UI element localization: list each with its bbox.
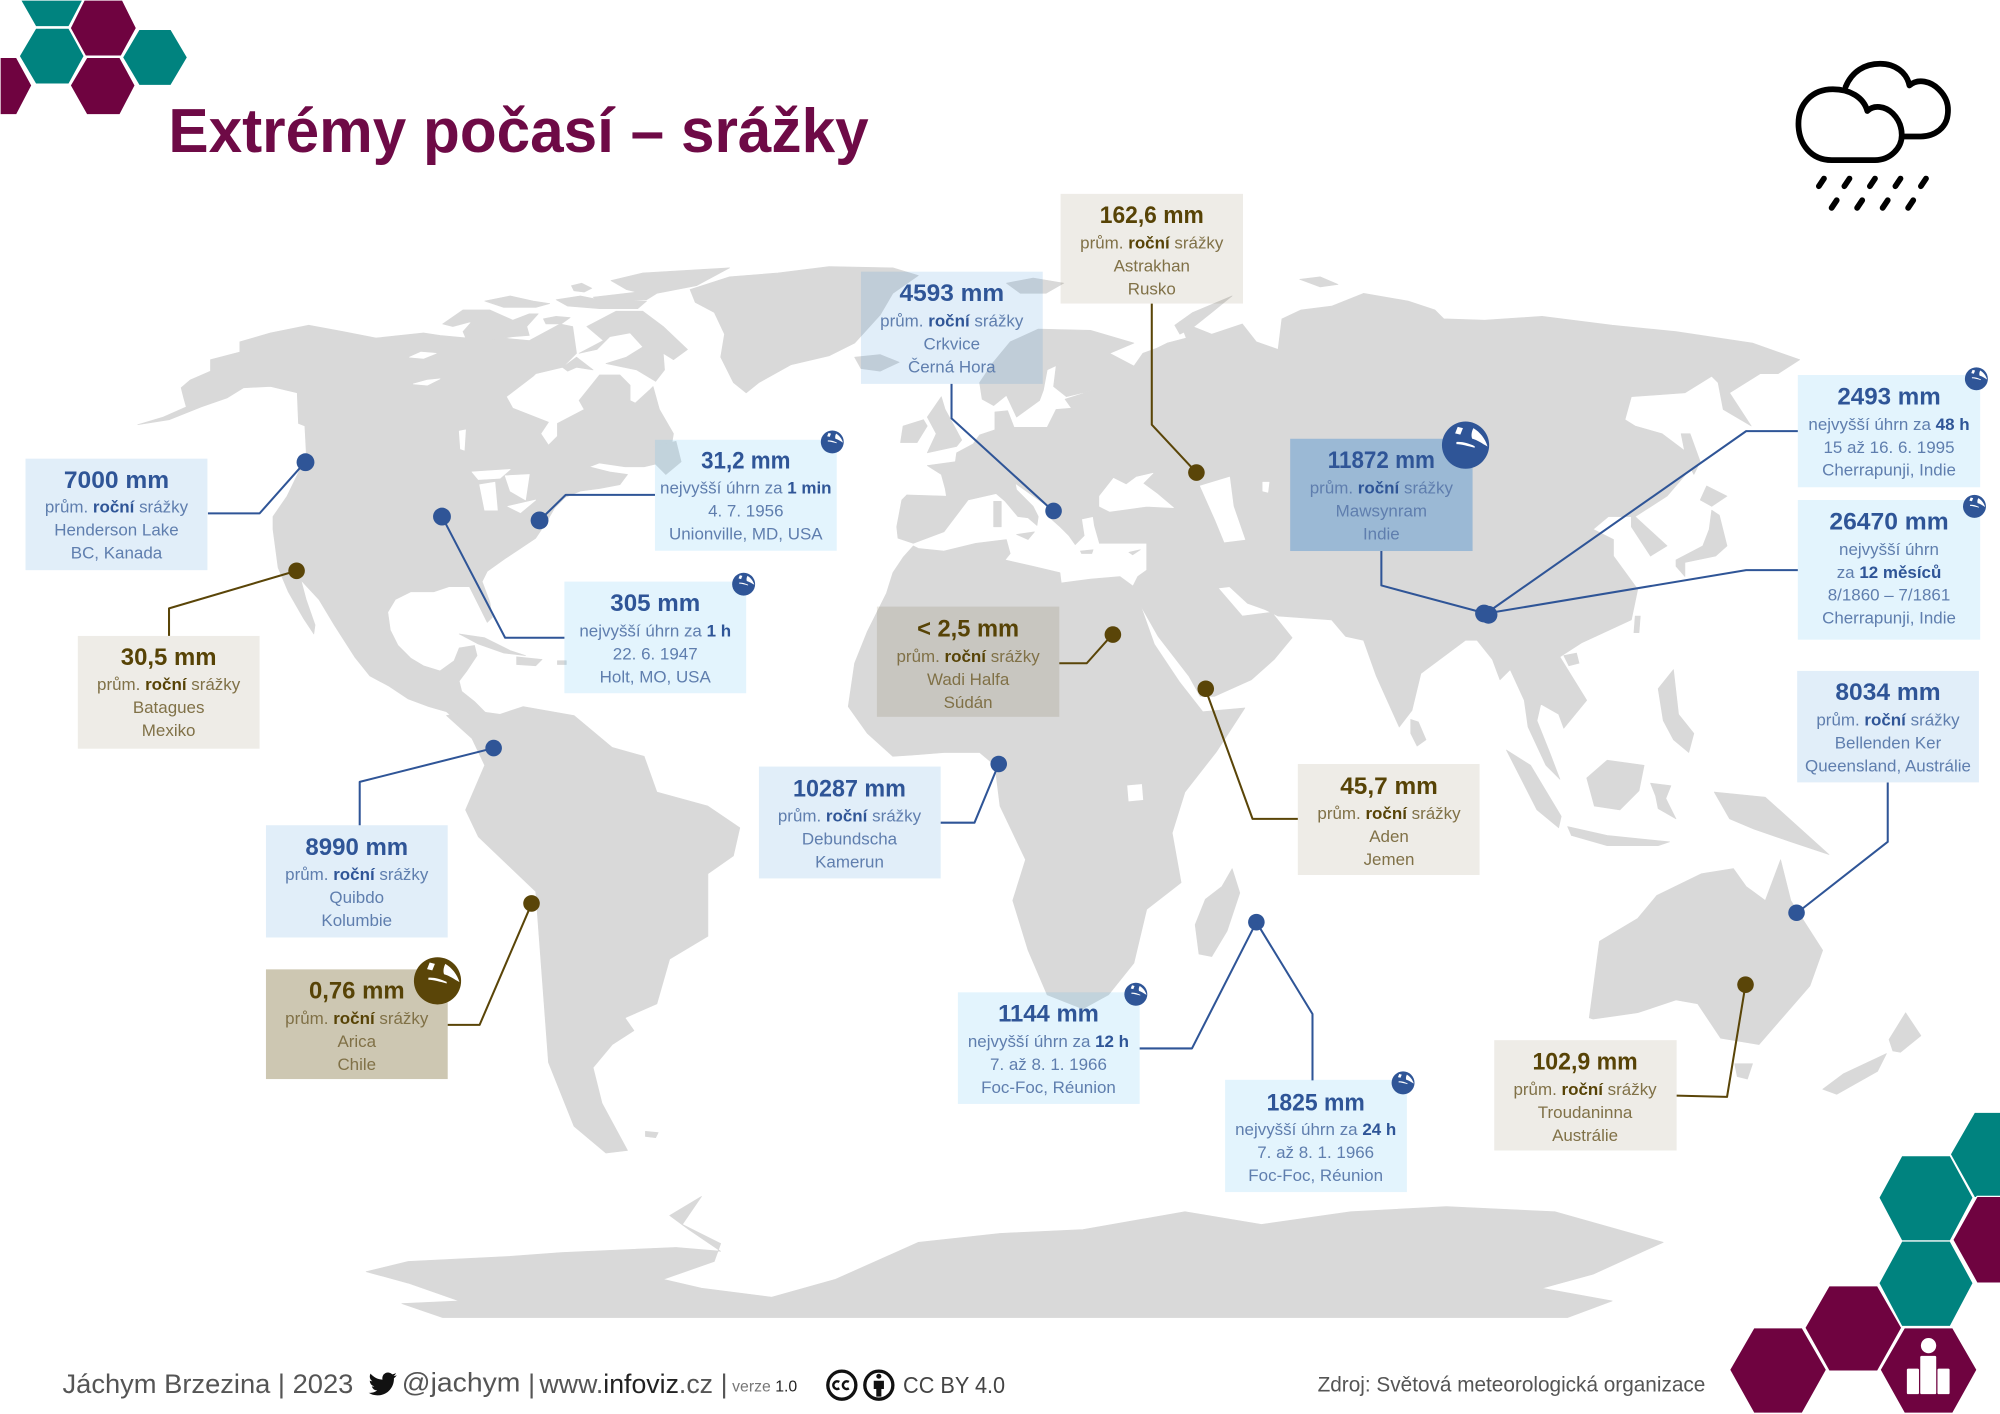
callout: 10287 mm Debundscha: Debundscha [802,829,898,848]
callout: 2493 mm Cherrapunji: 2493 mm [1837,383,1941,410]
footer: website and version: | [721,1369,728,1399]
callout: 8034 mm Bellenden Ker: prům. roční srážky [1816,711,1960,730]
callout: 26470 mm Cherrapunji: 8/1860 – 7/1861 [1828,586,1950,605]
callout: < 2,5 mm Wadi Halfa: Súdán [944,693,993,712]
callout: 0,76 mm Arica: Chile [337,1055,376,1074]
map: Eurasia [897,293,1800,779]
map: Greenland [690,267,918,393]
callout: 2493 mm Cherrapunji: 15 až 16. 6. 1995 [1823,438,1955,457]
callout: 10287 mm Debundscha: Kamerun [815,852,884,871]
callout: 11872 mm Mawsynram: Mawsynram [1336,502,1427,521]
callout: 1144 mm Foc-Foc: 7. až 8. 1. 1966 [990,1055,1107,1074]
callout: 162,6 mm Astrakhan: prům. roční srážky [1080,234,1224,253]
decorative hexagons: bottom right [1730,1112,2000,1413]
callout: 10287 mm Debundscha: prům. roční srážky [778,806,922,825]
callout: 8990 mm Quibdo: Kolumbie [321,911,392,930]
callout: 162,6 mm Astrakhan [1061,194,1243,481]
callout: 1144 mm Foc-Foc: Foc-Foc, Réunion [981,1078,1116,1097]
callout: 30,5 mm Batagues: Batagues [133,698,204,717]
callout: 102,9 mm Troudaninna: 102,9 mm [1532,1048,1638,1075]
callout: 11872 mm Mawsynram: 11872 mm [1328,447,1435,474]
callout: 305 mm Holt: 22. 6. 1947 [613,644,698,663]
icon: rain cloud [1798,64,1948,208]
callout: 0,76 mm Arica: prům. roční srážky [285,1009,429,1028]
callout: 10287 mm Debundscha: 10287 mm [793,776,906,803]
callout: 305 mm Holt: nejvyšší úhrn za 1 h [579,621,731,640]
callout: 26470 mm Cherrapunji: 26470 mm [1829,508,1949,535]
callout: 1825 mm Foc-Foc: 1825 mm [1267,1089,1365,1116]
callout: 30,5 mm Batagues: prům. roční srážky [97,675,241,694]
callout: 162,6 mm Astrakhan: Astrakhan [1114,257,1190,276]
callout: 2493 mm Cherrapunji: Cherrapunji, Indie [1822,461,1956,480]
callout: 1825 mm Foc-Foc [1225,922,1415,1192]
callout: 31,2 mm Unionville: 4. 7. 1956 [708,502,784,521]
decorative hexagons: top left [0,0,188,115]
callout: 305 mm Holt: Holt, MO, USA [600,667,712,686]
map: Africa [848,540,1245,1009]
callout: 31,2 mm Unionville: 31,2 mm [701,448,790,475]
callout: 102,9 mm Troudaninna [1494,976,1754,1150]
callout: 162,6 mm Astrakhan: Rusko [1128,280,1176,299]
callout: 4593 mm Crkvice: Černá Hora [908,357,996,376]
callout: 1144 mm Foc-Foc: 1144 mm [998,1001,1099,1028]
world map [138,267,1921,1318]
callout: 4593 mm Crkvice: 4593 mm [899,280,1004,307]
callout: 26470 mm Cherrapunji: za 12 měsíců [1837,563,1941,582]
map: Antarctica [366,1196,1663,1318]
map: Madagascar [1195,869,1240,957]
callout: 45,7 mm Aden: Aden [1369,827,1409,846]
footer: source: Zdroj: Světová meteorologická organizace [1318,1374,1705,1397]
callout: 30,5 mm Batagues [78,562,305,749]
footer: author and year: Jáchym Brzezina | 2023 [63,1369,353,1399]
callout: 1825 mm Foc-Foc: Foc-Foc, Réunion [1248,1166,1383,1185]
callout: 4593 mm Crkvice: Crkvice [924,334,980,353]
callout: 26470 mm Cherrapunji: nejvyšší úhrn [1839,540,1939,559]
callout: 162,6 mm Astrakhan: 162,6 mm [1100,202,1204,229]
callout: < 2,5 mm Wadi Halfa: prům. roční srážky [897,647,1040,666]
icon: creative commons [828,1371,893,1399]
callout: 30,5 mm Batagues: Mexiko [142,721,195,740]
map: Canadian Arctic islands [443,268,730,666]
callout: 31,2 mm Unionville: Unionville, MD, USA [669,525,823,544]
callout: 4593 mm Crkvice [861,272,1062,519]
map: South America [446,707,740,1153]
callout: 8990 mm Quibdo: prům. roční srážky [285,865,429,884]
callout: 2493 mm Cherrapunji: nejvyšší úhrn za 48 h [1808,415,1970,434]
callout: 0,76 mm Arica [266,895,540,1079]
footer: license: CC BY 4.0 [903,1372,1005,1398]
callout: 31,2 mm Unionville: nejvyšší úhrn za 1 min [660,479,832,498]
footer: website and version [528,1369,797,1399]
callout: 8990 mm Quibdo: Quibdo [329,888,384,907]
callout: 0,76 mm Arica: 0,76 mm [309,978,405,1005]
callout: 8990 mm Quibdo [266,740,502,937]
callout: 8034 mm Bellenden Ker: 8034 mm [1835,679,1941,706]
callout: 11872 mm Mawsynram: prům. roční srážky [1310,479,1453,498]
callout: 31,2 mm Unionville [531,430,844,551]
callout: 0,76 mm Arica: Arica [337,1032,377,1051]
map: Tasmania and New Zealand [1735,1013,1921,1094]
callout: 26470 mm Cherrapunji [1480,495,1986,640]
callout: 7000 mm Henderson Lake [26,453,314,570]
callout: 8034 mm Bellenden Ker [1788,671,1979,921]
callout: 8034 mm Bellenden Ker: Bellenden Ker [1835,734,1942,753]
callout: 7000 mm Henderson Lake: 7000 mm [64,467,169,494]
callout: 26470 mm Cherrapunji: Cherrapunji, Indie [1822,609,1956,628]
callout: 2493 mm Cherrapunji [1486,367,1988,614]
footer: twitter handle: @jachym [402,1368,520,1398]
callout: 305 mm Holt [433,508,755,693]
callout: 7000 mm Henderson Lake: BC, Kanada [71,544,163,563]
callout: < 2,5 mm Wadi Halfa: < 2,5 mm [917,615,1019,642]
icon: people statistics [1907,1338,1950,1394]
callout: 1825 mm Foc-Foc: nejvyšší úhrn za 24 h [1235,1120,1396,1139]
map: Falkland islands [645,1131,658,1138]
map: inland seas and lakes [409,352,1269,801]
callout: 7000 mm Henderson Lake: prům. roční srážky [45,498,189,517]
callout: 11872 mm Mawsynram: Indie [1363,525,1400,544]
title: Extrémy počasí – srážky [168,96,869,166]
callout: 10287 mm Debundscha [759,756,1007,878]
map: Japan and Sakhalin [1676,434,1727,577]
footer: website and version: | [528,1369,535,1399]
callout: 11872 mm Mawsynram [1290,422,1493,622]
map: North America [138,324,673,732]
callout: 305 mm Holt: 305 mm [610,590,700,617]
map: Southeast Asia islands [1411,616,1829,855]
callout: 1144 mm Foc-Foc: nejvyšší úhrn za 12 h [968,1032,1129,1051]
callout: 102,9 mm Troudaninna: Austrálie [1552,1126,1618,1145]
callout: 7000 mm Henderson Lake: Henderson Lake [54,521,179,540]
callout: < 2,5 mm Wadi Halfa [877,607,1121,717]
footer: website and version: verze 1.0 [732,1379,797,1396]
callout: 45,7 mm Aden: 45,7 mm [1340,773,1438,800]
callout: 8034 mm Bellenden Ker: Queensland, Austrálie [1805,757,1971,776]
callout: 45,7 mm Aden [1197,680,1480,875]
callout: 102,9 mm Troudaninna: prům. roční srážky [1513,1080,1657,1099]
footer: website and version: www.infoviz.cz [539,1369,713,1399]
callout: 1825 mm Foc-Foc: 7. až 8. 1. 1966 [1257,1143,1374,1162]
map: Australia [1589,860,1823,1045]
callout: 8990 mm Quibdo: 8990 mm [305,834,408,861]
map: Europe and Arctic islands [855,277,1338,555]
callout: 45,7 mm Aden: Jemen [1364,850,1414,869]
callout: 4593 mm Crkvice: prům. roční srážky [880,312,1024,331]
callout: 102,9 mm Troudaninna: Troudaninna [1538,1103,1633,1122]
callout: 30,5 mm Batagues: 30,5 mm [121,644,216,671]
callout: 45,7 mm Aden: prům. roční srážky [1317,804,1461,823]
callout: 1144 mm Foc-Foc [958,914,1265,1104]
icon: twitter bird [369,1372,397,1395]
callout: < 2,5 mm Wadi Halfa: Wadi Halfa [927,670,1010,689]
